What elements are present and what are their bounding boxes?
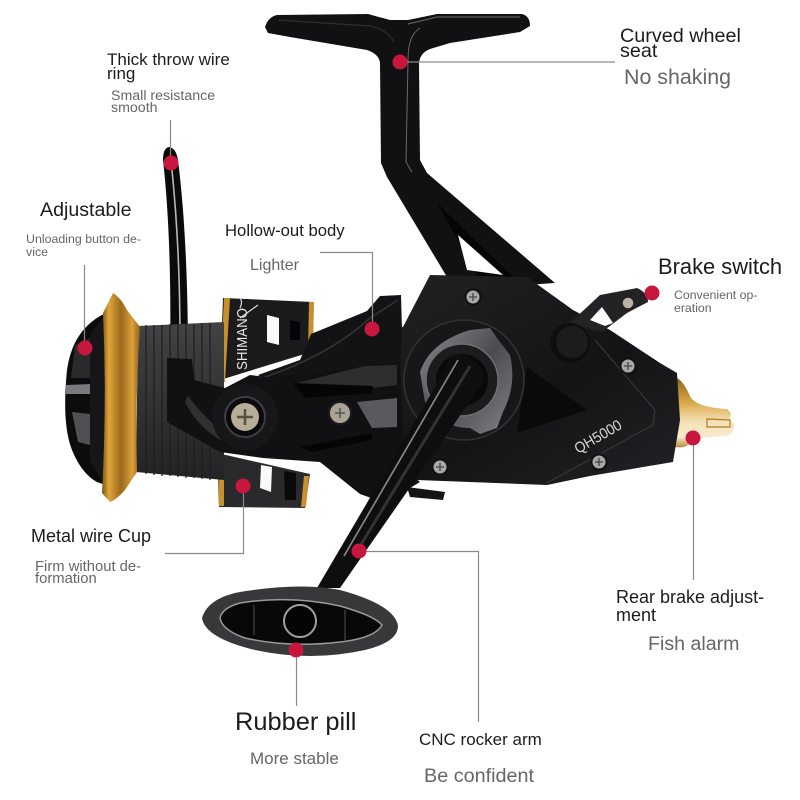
callout: rubber pill: More stable (250, 749, 339, 768)
callout: thick throw wire ring: smooth (111, 100, 158, 116)
leader line: metal wire cup (165, 486, 244, 554)
callout: adjustable: Unloading button de- (26, 232, 141, 246)
callout: CNC rocker arm: CNC rocker arm (419, 730, 542, 749)
spool cap (65, 312, 108, 484)
callout: brake switch: Brake switch (658, 254, 782, 279)
callout: CNC rocker arm (419, 730, 542, 787)
callout: curved wheel seat (620, 25, 741, 89)
callout: adjustable: Adjustable (40, 199, 132, 221)
callout: rubber pill: Rubber pill (235, 708, 356, 736)
rear drum bottom (217, 453, 310, 508)
leader line: rear brake (692, 438, 694, 580)
leader line: adjustable (84, 265, 86, 348)
callout: brake switch: Convenient op- (674, 288, 757, 302)
rotor disc (404, 320, 524, 440)
spool body (136, 322, 224, 480)
callout: metal wire cup: Firm without de- (35, 559, 141, 575)
callout: rear brake adjustment: Fish alarm (648, 633, 739, 655)
callout: brake switch (658, 254, 782, 315)
callout: adjustable: vice (26, 245, 48, 259)
callout: thick throw wire ring (107, 50, 230, 116)
callout: rubber pill (235, 708, 356, 768)
callout: hollow-out body: Hollow-out body (225, 221, 345, 240)
callout: hollow-out body (225, 221, 345, 274)
rear brake knob (675, 378, 734, 447)
crank arm (317, 354, 484, 588)
callout: curved wheel seat: Curved wheel (620, 25, 741, 47)
brake switch lever (550, 288, 648, 363)
callout: rear brake adjustment (616, 587, 764, 655)
bail arm and T handle (265, 14, 555, 290)
gold spool flange (102, 293, 140, 502)
callout: brake switch: eration (674, 301, 712, 315)
reel illustration (65, 14, 734, 656)
callout: rear brake adjustment: ment (616, 605, 656, 625)
leader line: rubber pill (296, 650, 298, 706)
main reel body (320, 275, 680, 485)
callout: metal wire cup: Metal wire Cup (31, 526, 151, 546)
leader line: throw wire ring (170, 120, 172, 162)
callout: rear brake adjustment: Rear brake adjust- (616, 587, 764, 607)
leader line: CNC rocker arm (359, 552, 478, 722)
leader line: hollow-out body (320, 252, 372, 328)
marker dots (78, 54, 700, 658)
callout: adjustable (26, 199, 141, 259)
frame screws (432, 290, 636, 474)
model label: QH5000 (572, 417, 625, 457)
callout: thick throw wire ring: ring (107, 64, 135, 83)
callout: metal wire cup (31, 526, 151, 587)
callout: thick throw wire ring: Small resistance (111, 88, 215, 104)
callout: thick throw wire ring: Thick throw wire (107, 50, 230, 69)
callout: curved wheel seat: seat (620, 40, 658, 62)
rear drum top (220, 298, 314, 382)
SHIMANO logo text: SHIMANO (234, 308, 251, 370)
callout: hollow-out body: Lighter (250, 257, 300, 274)
callout: metal wire cup: formation (35, 571, 97, 587)
callout: curved wheel seat: No shaking (624, 65, 731, 89)
bail wire ring (163, 147, 188, 360)
callout: CNC rocker arm: Be confident (424, 765, 534, 787)
rubber handle knob (202, 586, 398, 656)
leader line: curved wheel seat (400, 61, 615, 63)
frame arms around spool (167, 295, 445, 503)
